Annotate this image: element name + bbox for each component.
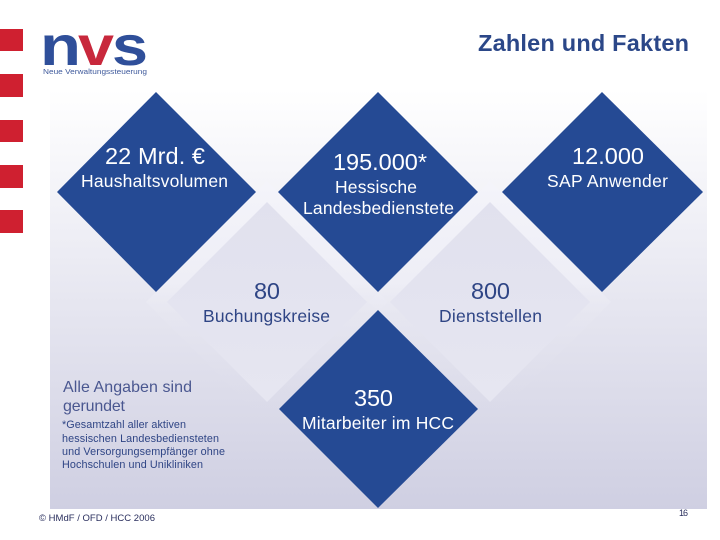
footnote: hessischen Landesbediensteten	[62, 433, 219, 445]
blue diamond: Landesbedienstete	[278, 92, 478, 292]
light diamond: Dienststellen	[369, 181, 611, 423]
page number: 16	[679, 508, 688, 518]
blue diamond: Haushaltsvolumen	[57, 92, 256, 292]
logo: nvs: Neue Verwaltungssteuerung	[43, 67, 147, 76]
blue diamond: Landesbedienstete: 195.000*	[333, 149, 427, 175]
copyright: © HMdF / OFD / HCC 2006	[39, 513, 155, 524]
light diamond: Buchungskreise: Buchungskreise	[203, 306, 330, 326]
logo: nvs: n	[40, 15, 81, 77]
blue diamond: SAP Anwender	[502, 92, 703, 292]
note: rounding: gerundet	[63, 398, 126, 415]
logo: nvs: v	[78, 15, 114, 77]
blue diamond: HCC: Mitarbeiter im HCC	[302, 413, 454, 433]
blue diamond: HCC	[279, 310, 478, 508]
blue diamond: SAP Anwender: 12.000	[572, 143, 644, 169]
light diamond: Buchungskreise	[146, 181, 388, 423]
blue diamond: Haushaltsvolumen: 22 Mrd. €	[105, 143, 205, 169]
background panel	[50, 90, 707, 509]
blue diamond: HCC: 350	[354, 385, 393, 411]
title: Zahlen und Fakten	[478, 30, 689, 56]
footnote	[62, 419, 225, 471]
note: rounding	[63, 379, 192, 415]
note: rounding: Alle Angaben sind	[63, 379, 192, 396]
logo: nvs: s	[112, 15, 148, 77]
blue diamond: Landesbedienstete: Hessische	[335, 177, 417, 197]
red side markers	[0, 29, 23, 233]
footnote: und Versorgungsempfänger ohne	[62, 446, 225, 458]
blue diamond: Haushaltsvolumen: Haushaltsvolumen	[81, 171, 228, 191]
logo: nvs	[40, 15, 148, 77]
footnote: Hochschulen und Unikliniken	[62, 459, 203, 471]
light diamond: Dienststellen: Dienststellen	[439, 306, 542, 326]
light diamond: Buchungskreise: 80	[254, 278, 280, 304]
light diamond: Dienststellen: 800	[471, 278, 510, 304]
blue diamond: Landesbedienstete: Landesbedienstete	[303, 198, 454, 218]
footnote: *Gesamtzahl aller aktiven	[62, 419, 186, 431]
blue diamond: SAP Anwender: SAP Anwender	[547, 171, 668, 191]
